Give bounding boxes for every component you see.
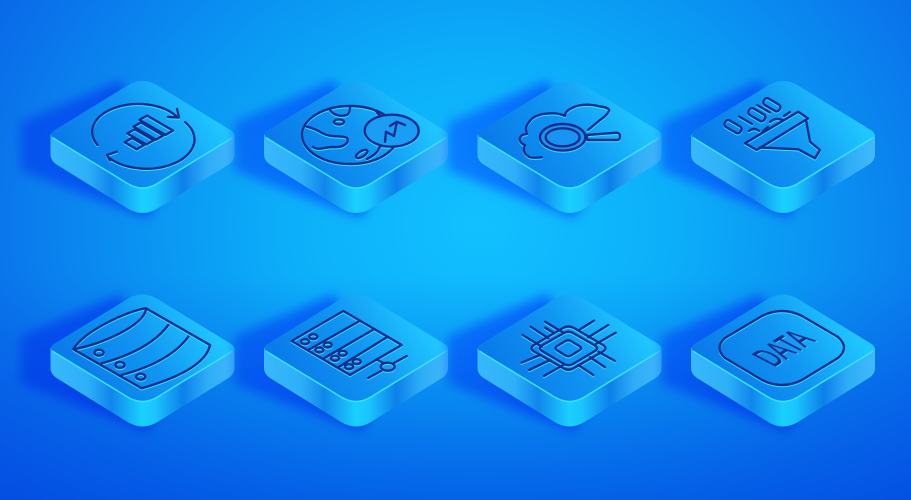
tile: data label xyxy=(661,294,875,432)
icon: rounded frame with DATA lettering: DATA xyxy=(745,325,824,371)
tile: data funnel xyxy=(661,80,875,218)
icon: bar chart with circular arrows xyxy=(92,104,195,169)
tile: bar chart refresh xyxy=(20,80,234,218)
tile: processor chip xyxy=(448,294,662,432)
icon: server rack with connector xyxy=(292,311,407,378)
tile: server rack xyxy=(234,294,448,432)
tile: globe with growth xyxy=(234,80,448,218)
icon: binary digits and funnel xyxy=(723,97,820,158)
tile: cloud search xyxy=(448,80,662,218)
icon: cloud and magnifier xyxy=(520,105,620,158)
icon: globe and trend bubble xyxy=(302,106,419,164)
tile: database xyxy=(20,294,234,432)
icon: rounded frame with DATA lettering xyxy=(720,311,844,385)
icon: database cylinder xyxy=(73,308,210,388)
icon: microchip xyxy=(522,321,616,376)
